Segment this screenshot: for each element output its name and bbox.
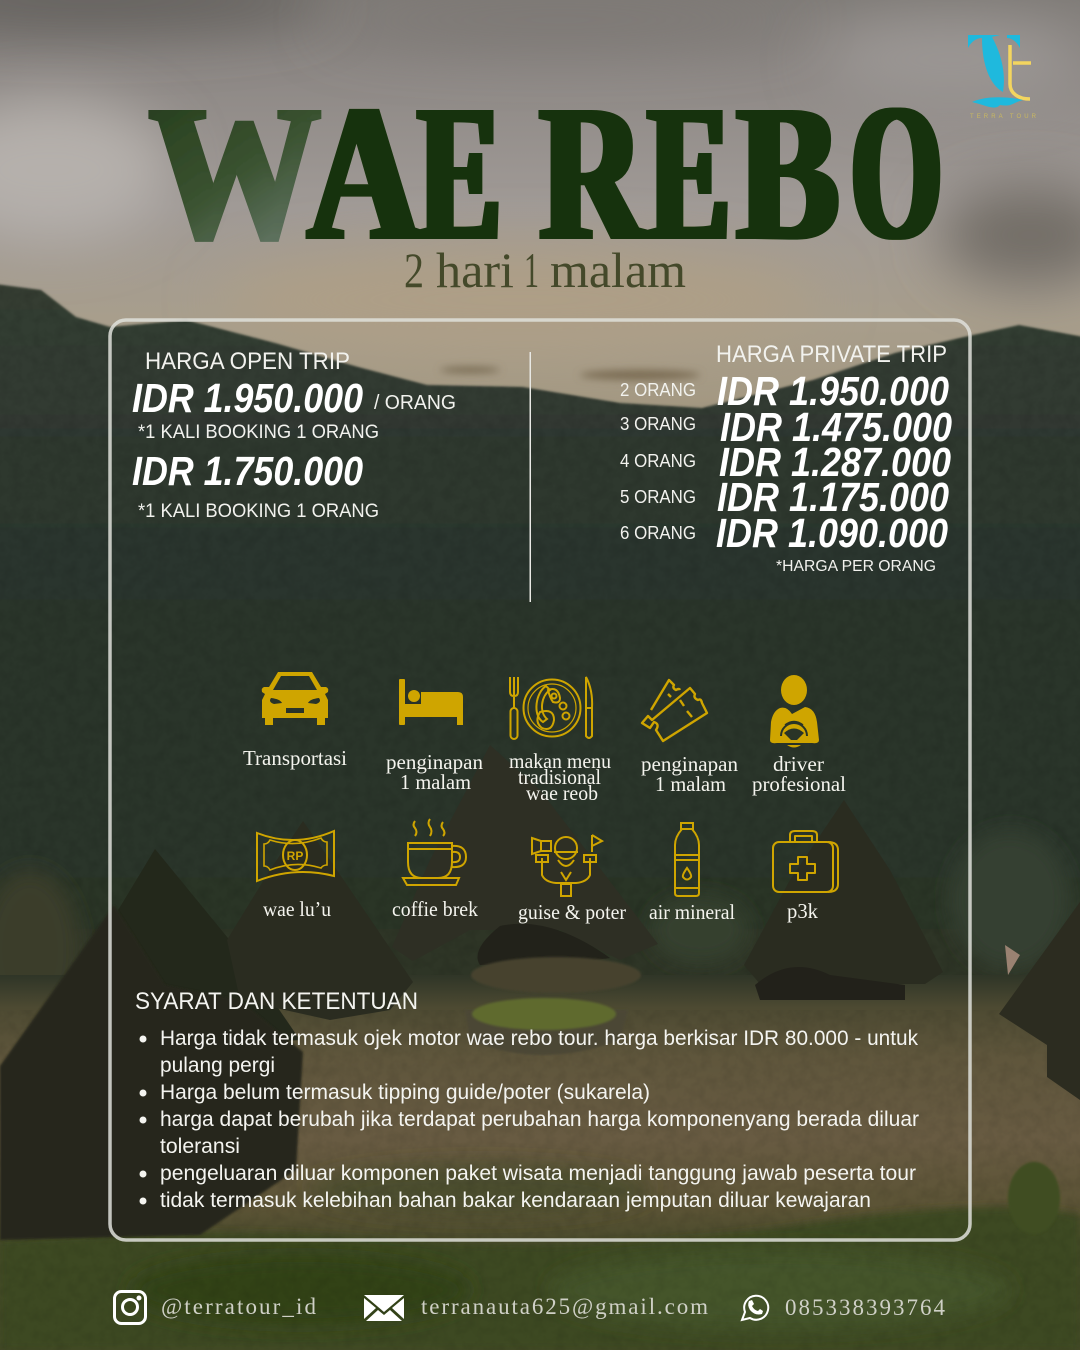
panel: private trip prices: *HARGA PER ORANG xyxy=(776,558,936,575)
panel: open trip prices: *1 KALI BOOKING 1 ORANG xyxy=(138,422,379,443)
panel: main content xyxy=(110,320,970,1240)
terms and conditions: toleransi xyxy=(160,1135,240,1158)
icon labels: penginapan xyxy=(641,752,739,776)
icon labels: tradisional xyxy=(518,765,601,789)
email address: terranauta625@gmail.com xyxy=(421,1294,708,1319)
subtitle xyxy=(404,242,686,298)
icon labels: p3k xyxy=(787,899,818,923)
panel: private trip prices: IDR 1.287.000 xyxy=(719,439,951,485)
subtitle: malam xyxy=(550,242,686,298)
phone number: 085338393764 xyxy=(785,1295,946,1320)
terms and conditions: SYARAT DAN KETENTUAN xyxy=(135,988,418,1015)
icon labels: Transportasi xyxy=(243,746,347,770)
panel: private trip prices: 4 ORANG xyxy=(620,451,696,471)
panel: private trip prices: IDR 1.090.000 xyxy=(716,510,948,556)
subtitle: 1 xyxy=(524,242,539,298)
panel: open trip prices: *1 KALI BOOKING 1 ORANG xyxy=(138,501,379,522)
icon: plate and cutlery xyxy=(510,677,592,739)
icon: envelope xyxy=(364,1295,404,1321)
icon: banknote: RP xyxy=(287,849,303,863)
panel: open trip prices: IDR 1.750.000 xyxy=(132,448,363,494)
icon: water bottle xyxy=(675,823,699,896)
title: WAE REBO xyxy=(150,64,942,280)
icon labels: makan menu xyxy=(509,749,611,773)
panel: private trip prices: IDR 1.475.000 xyxy=(720,404,952,450)
icon labels: coffie brek xyxy=(392,897,478,921)
panel: open trip prices: HARGA OPEN TRIP xyxy=(145,348,350,375)
instagram handle: @terratour_id xyxy=(161,1294,316,1319)
icon: bed xyxy=(399,679,463,725)
icon: driver xyxy=(770,675,819,748)
terms and conditions xyxy=(135,988,919,1212)
hut silhouettes xyxy=(70,849,300,1050)
panel: private trip prices: 6 ORANG xyxy=(620,523,696,543)
panel: private trip prices xyxy=(620,341,952,575)
title: WAE REBO: A xyxy=(308,65,420,280)
terms and conditions: pengeluaran diluar komponen paket wisata menjadi tanggung jawab peserta tour xyxy=(160,1162,916,1185)
panel: open trip prices: / ORANG xyxy=(374,392,456,414)
icon labels xyxy=(243,746,846,924)
title: WAE REBO: R xyxy=(540,65,645,280)
icon labels: air mineral xyxy=(649,900,735,924)
title: WAE REBO: E xyxy=(648,65,730,280)
terms and conditions: pulang pergi xyxy=(160,1054,275,1077)
icon: first aid kit xyxy=(773,831,838,892)
logo: Terra Tour: TERRA TOUR xyxy=(970,114,1037,120)
title: WAE REBO: O xyxy=(851,64,942,279)
icon: tickets xyxy=(642,680,707,741)
icon labels: profesional xyxy=(752,772,846,796)
icon labels: penginapan xyxy=(386,750,484,774)
icon: banknote xyxy=(257,831,334,881)
icon labels: guise & poter xyxy=(518,900,626,924)
title: WAE REBO: W xyxy=(150,65,320,280)
panel: open trip prices xyxy=(132,348,456,522)
terms and conditions: tidak termasuk kelebihan bahan bakar kendaraan jemputan diluar kewajaran xyxy=(160,1189,871,1212)
subtitle: hari xyxy=(436,242,514,298)
panel: private trip prices: IDR 1.175.000 xyxy=(717,474,949,520)
icon labels: driver xyxy=(773,752,824,776)
icon: car xyxy=(262,672,328,725)
icon labels: wae reob xyxy=(526,781,598,805)
subtitle: 2 xyxy=(404,242,424,298)
terms and conditions: Harga tidak termasuk ojek motor wae rebo tour. harga berkisar IDR 80.000 - untuk xyxy=(160,1027,918,1050)
panel: private trip prices: 3 ORANG xyxy=(620,414,696,434)
panel: private trip prices: IDR 1.950.000 xyxy=(717,368,949,414)
panel: private trip prices: 2 ORANG xyxy=(620,380,696,400)
panel: open trip prices: IDR 1.950.000 xyxy=(132,375,363,421)
stone rings and grass mound xyxy=(471,957,641,993)
terms and conditions: harga dapat berubah jika terdapat perubahan harga komponenyang berada diluar xyxy=(160,1108,919,1131)
logo: Terra Tour xyxy=(968,35,1037,120)
icon: instagram xyxy=(114,1292,146,1324)
title: WAE REBO: E xyxy=(418,65,501,280)
terms and conditions: Harga belum termasuk tipping guide/poter (sukarela) xyxy=(160,1081,650,1104)
icon: coffee cup xyxy=(403,819,466,885)
icon labels: 1 malam xyxy=(655,772,726,796)
icon labels: 1 malam xyxy=(400,770,471,794)
panel: private trip prices: HARGA PRIVATE TRIP xyxy=(716,341,947,368)
icon: tour guide xyxy=(532,835,602,896)
icon labels: wae lu’u xyxy=(263,897,331,921)
icon: whatsapp xyxy=(742,1296,768,1320)
title: WAE REBO: B xyxy=(737,65,839,280)
panel: private trip prices: 5 ORANG xyxy=(620,487,696,507)
